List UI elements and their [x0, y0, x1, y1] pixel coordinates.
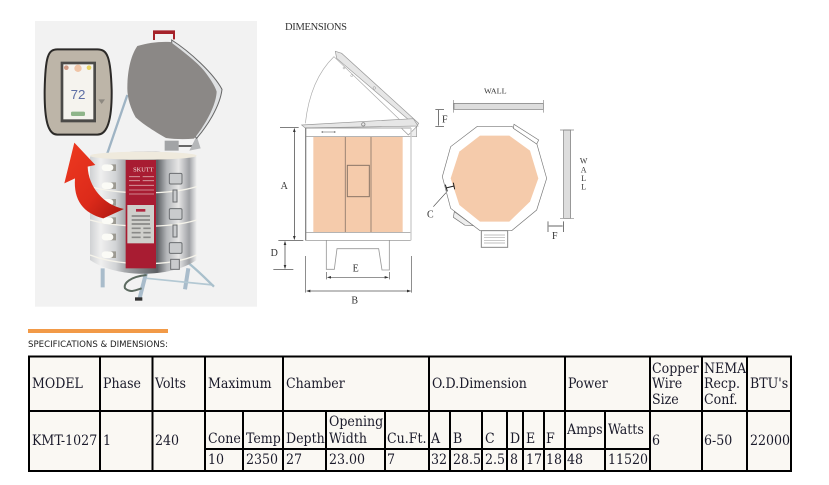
table header text: Chamber	[286, 376, 346, 392]
table values: 10	[208, 452, 224, 468]
table values: 48	[567, 452, 583, 468]
table header text: Maximum	[208, 376, 272, 392]
bottom side box	[453, 212, 473, 226]
table sub-header text: Watts	[608, 422, 644, 438]
dimension letters: A	[281, 181, 289, 192]
wall label side: W	[580, 156, 588, 165]
table header text: Volts	[154, 376, 186, 392]
table sub-header text: C	[485, 431, 495, 447]
table values: 7	[387, 452, 395, 468]
wall label side: L	[581, 174, 586, 183]
dimensions heading: DIMENSIONS	[285, 22, 347, 33]
side latches	[169, 173, 182, 269]
F offset side: F	[552, 231, 558, 242]
table values: 6-50	[704, 433, 732, 449]
table values: KMT-1027	[32, 433, 97, 449]
table header text: Phase	[103, 376, 141, 392]
panel: kiln photo	[35, 21, 257, 307]
table sub-header text: Depth	[286, 431, 325, 447]
table values: 11520	[608, 452, 648, 468]
section heading rule	[28, 329, 168, 333]
kiln stand	[326, 240, 389, 270]
table values: 27	[286, 452, 302, 468]
table header text: BTU's	[750, 376, 788, 392]
wall label side: L	[581, 183, 586, 192]
wall label side	[580, 156, 588, 192]
dimension letters: B	[351, 295, 358, 306]
table sub-header text: Temp	[246, 431, 281, 447]
red arrow	[64, 143, 124, 218]
table header text	[32, 361, 788, 408]
top side box	[513, 124, 539, 144]
table values: 6	[652, 433, 660, 449]
table sub-header text: A	[430, 431, 441, 447]
table sub-header text: D	[510, 431, 520, 447]
kiln chamber	[305, 128, 411, 240]
dimension arrows	[273, 127, 411, 293]
C thickness marker: C	[427, 209, 434, 220]
dimension letters: E	[353, 263, 359, 274]
F offset top: F	[442, 114, 448, 125]
table values: 8	[510, 452, 518, 468]
table values: 2.5	[485, 452, 505, 468]
table values: 1	[103, 433, 111, 449]
table header text: Copper	[652, 361, 700, 377]
section heading: SPECIFICATIONS & DIMENSIONS:	[28, 340, 168, 350]
firing chamber	[451, 136, 538, 222]
horizontal wall	[453, 100, 543, 113]
table header text: Power	[568, 376, 609, 392]
vertical wall	[560, 130, 574, 218]
table header text: NEMA	[704, 361, 747, 377]
temperature reading: 72	[71, 87, 85, 102]
open kiln lid	[127, 31, 222, 139]
dimension letters: D	[271, 248, 278, 259]
table sub-header text: Opening	[329, 414, 383, 430]
red control box	[126, 160, 156, 268]
kiln body	[90, 152, 197, 274]
table values: 28.5	[453, 452, 481, 468]
F offset top	[435, 109, 448, 126]
element terminals	[105, 168, 116, 255]
table values: 2350	[246, 452, 278, 468]
kiln side elevation drawing	[271, 51, 419, 306]
kiln stand and gas hose	[103, 247, 214, 301]
table header text: Conf.	[704, 392, 738, 408]
table sub-header text: Width	[329, 431, 367, 447]
wall label side: A	[581, 165, 587, 174]
control box	[481, 231, 508, 247]
table header text: Size	[652, 392, 679, 408]
table values: 22000	[750, 433, 790, 449]
table sub-header text: Cu.Ft.	[387, 431, 427, 447]
table header text: MODEL	[32, 376, 84, 392]
thermostat callout	[45, 49, 112, 135]
table values: 23.00	[329, 452, 365, 468]
lid support arm and hinge	[107, 95, 201, 153]
skutt logo: SKUTT	[133, 167, 154, 174]
open lid outline	[302, 51, 419, 137]
dimension letters	[271, 181, 359, 306]
wall label top: WALL	[484, 86, 507, 95]
specifications table	[28, 356, 792, 472]
table sub-header text	[208, 414, 644, 447]
table values	[32, 433, 790, 468]
table sub-header text: F	[546, 431, 555, 447]
table header text: Wire	[652, 376, 682, 392]
kiln octagon outline	[442, 126, 547, 231]
F offset side	[548, 221, 563, 242]
C thickness marker	[427, 183, 455, 220]
table values: 32	[431, 452, 447, 468]
table header text: O.D.Dimension	[432, 376, 527, 392]
table sub-header text: Cone	[208, 431, 241, 447]
table values: 18	[546, 452, 562, 468]
table sub-header text: Amps	[566, 422, 603, 438]
table values: 17	[526, 452, 542, 468]
table values: 240	[155, 433, 179, 449]
table header text: Recp.	[704, 376, 740, 392]
kiln plan view drawing	[427, 86, 588, 247]
table sub-header text: E	[526, 431, 535, 447]
table sub-header text: B	[453, 431, 462, 447]
